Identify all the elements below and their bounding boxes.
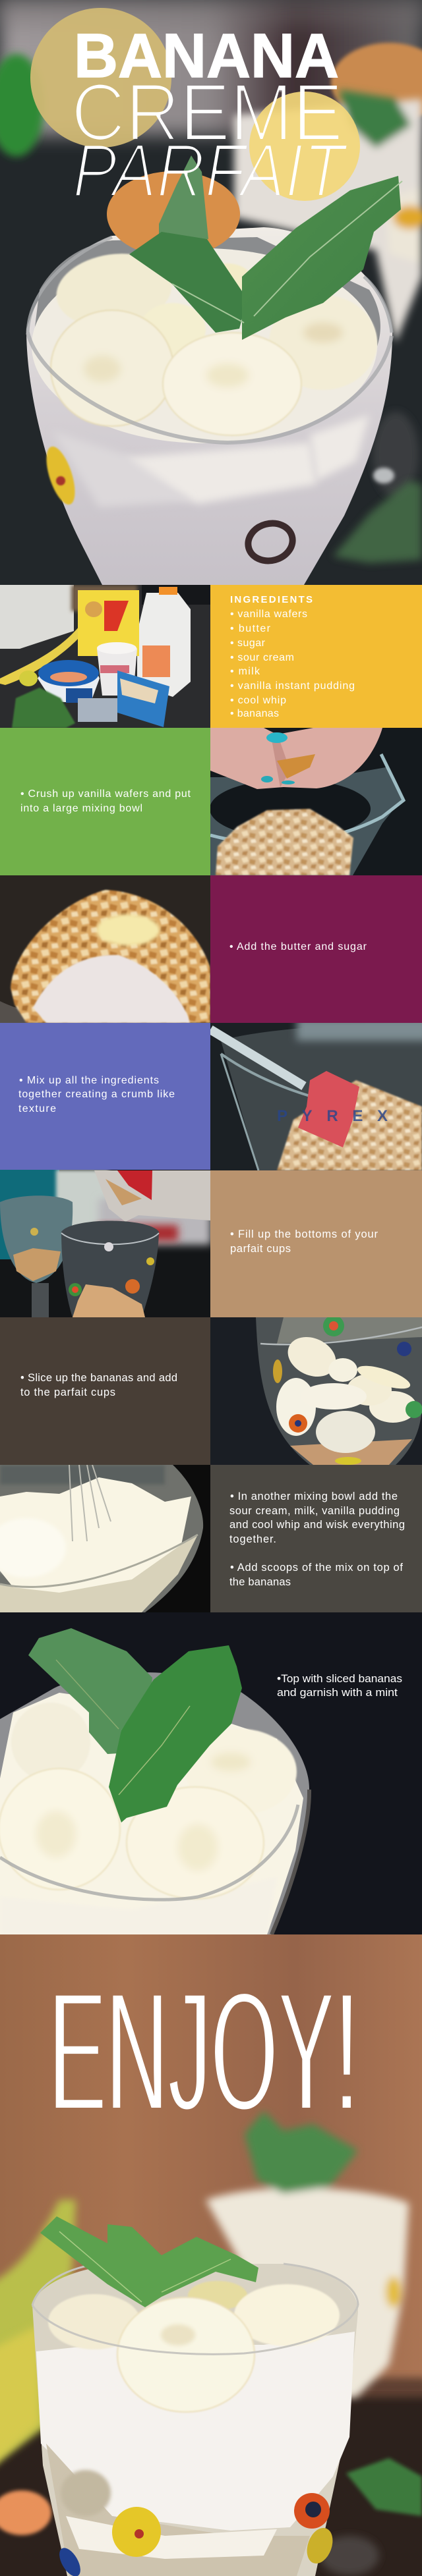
photo: butter and sugar on crumbs <box>0 875 210 1023</box>
panel: step slice bananas <box>0 1317 210 1465</box>
glass rim <box>32 2305 358 2354</box>
Nilla box <box>78 590 139 656</box>
panel: step butter and sugar: • Add the butter and sugar <box>229 941 367 952</box>
panel: ingredients: • bananas <box>230 708 279 719</box>
butter <box>78 698 117 722</box>
panel: step crush wafers: into a large mixing bowl <box>20 803 142 814</box>
butter <box>96 914 160 946</box>
photo: mixing crumbs with spatula <box>210 1023 422 1170</box>
back glass <box>0 1195 73 1283</box>
yellow circle <box>249 92 360 201</box>
hands <box>210 728 382 789</box>
glass flowers <box>55 2493 337 2576</box>
crumbs base <box>290 1439 412 1465</box>
panel: ingredients: • vanilla instant pudding <box>230 680 355 692</box>
icon: glass flower decorations <box>41 443 80 508</box>
pyrex lettering: PYREX <box>277 1107 388 1125</box>
panel: step mix ingredients <box>0 1023 210 1170</box>
panel: ingredients: • cool whip <box>230 695 286 706</box>
mint leaves <box>129 155 402 340</box>
panel: ingredients: • sour cream <box>230 652 294 663</box>
milk jug <box>137 593 191 697</box>
whisk <box>69 1465 111 1541</box>
panel: ingredients: • sugar <box>230 638 266 649</box>
crumbs <box>277 1080 422 1170</box>
photo: pouring crumbs in cups <box>0 1170 210 1317</box>
panel: step mix cream: • Add scoops of the mix on top of <box>230 1562 403 1574</box>
nails <box>266 732 287 743</box>
panel: step crush wafers: • Crush up vanilla wafers and put <box>20 788 191 800</box>
panel: step fill cups: • Fill up the bottoms of your <box>230 1228 378 1240</box>
mint <box>40 2216 258 2307</box>
wafer <box>107 171 240 257</box>
cool whip <box>38 665 100 703</box>
sugar <box>33 955 190 1023</box>
mint bunch <box>12 688 75 728</box>
panel: step slice bananas: • Slice up the bananas and add <box>20 1372 177 1384</box>
glass bowl <box>210 767 404 875</box>
panel: step fill cups <box>210 1170 422 1317</box>
panel: step mix ingredients: together creating a crumb like <box>18 1089 175 1100</box>
photo: whisking cream <box>0 1465 210 1612</box>
banana slices <box>48 2281 340 2412</box>
panel: step mix cream: the bananas <box>229 1576 291 1588</box>
crumbs <box>73 1284 145 1317</box>
panel: ingredients: INGREDIENTS <box>230 594 313 605</box>
spatula handle <box>210 1029 304 1086</box>
banana slices <box>276 1330 417 1453</box>
sour cream tub <box>97 642 137 696</box>
pouring bowl <box>94 1170 210 1222</box>
title line: BANANA: BANANA <box>74 21 339 91</box>
panel: step mix cream: and cool whip and wisk everything <box>229 1519 405 1531</box>
glass rim <box>28 333 392 443</box>
icon: blurred green bottle <box>0 54 44 157</box>
cream <box>0 1693 303 1934</box>
crumbs <box>11 890 210 1023</box>
glass <box>0 1672 309 1934</box>
bowl <box>0 1465 203 1612</box>
panel: step slice bananas: to the parfait cups <box>20 1386 115 1398</box>
whipped cream top <box>32 248 377 443</box>
text: top with bananas: •Top with sliced bananas <box>277 1672 402 1685</box>
cream <box>36 2332 355 2531</box>
front glass <box>32 2264 358 2576</box>
panel: step mix cream <box>210 1465 422 1612</box>
glass rim <box>0 1805 298 1900</box>
photo: ingredients <box>0 585 210 728</box>
back parfait <box>206 2111 409 2398</box>
text: top with bananas <box>277 1672 402 1699</box>
photo: parfait topped with bananas and mint <box>0 1628 311 1934</box>
crumbs <box>216 809 353 875</box>
blurred wafer <box>0 2490 51 2535</box>
gold circle <box>30 8 171 148</box>
panel: ingredients <box>210 585 422 728</box>
blurred mint bottom right <box>346 2458 422 2516</box>
cream <box>0 1477 191 1593</box>
panel: step mix cream: together. <box>229 1533 276 1545</box>
glass flowers <box>289 1414 307 1433</box>
panel: ingredients: • butter <box>230 623 271 634</box>
panel: ingredients: • milk <box>230 666 260 677</box>
glass bowl <box>26 227 392 585</box>
photo: finished parfaits on wood background <box>0 1934 422 2576</box>
back glass <box>234 90 422 343</box>
photo: hands crushing wafers over bowl <box>210 728 406 875</box>
spatula <box>117 1170 152 1200</box>
title <box>71 21 349 213</box>
hero photo: parfait with mint and banana <box>0 0 422 585</box>
panel: step mix ingredients: texture <box>18 1103 56 1114</box>
blurred mint bottom right <box>333 481 422 563</box>
wafer pieces <box>277 754 315 779</box>
banana <box>0 622 82 685</box>
front glass <box>61 1221 159 1317</box>
spatula head <box>298 1071 359 1147</box>
panel: step fill cups: parfait cups <box>230 1243 291 1255</box>
panel: step mix cream: sour cream, milk, vanilla pudding <box>229 1505 400 1517</box>
blurred bananas <box>0 2200 76 2470</box>
panel: ingredients: • vanilla wafers <box>230 609 307 620</box>
blue box <box>117 671 169 727</box>
panel: step mix cream: • In another mixing bowl add the <box>230 1491 398 1502</box>
title line: PARFAIT: PARFAIT <box>73 129 349 213</box>
photo: bananas in glass <box>256 1317 422 1465</box>
cream texture <box>125 443 316 504</box>
title line: CREME: CREME <box>71 68 343 158</box>
panel: step crush wafers <box>0 728 210 875</box>
banana slices <box>51 246 377 435</box>
text: top with bananas: and garnish with a mint <box>277 1686 398 1699</box>
icon: blurred wafer background <box>331 43 422 122</box>
panel: step butter and sugar <box>210 875 422 1023</box>
flowers <box>69 1283 82 1296</box>
mint leaves <box>28 1628 242 1822</box>
banana slices <box>0 1703 297 1899</box>
panel: step mix ingredients: • Mix up all the ingredients <box>19 1075 159 1086</box>
